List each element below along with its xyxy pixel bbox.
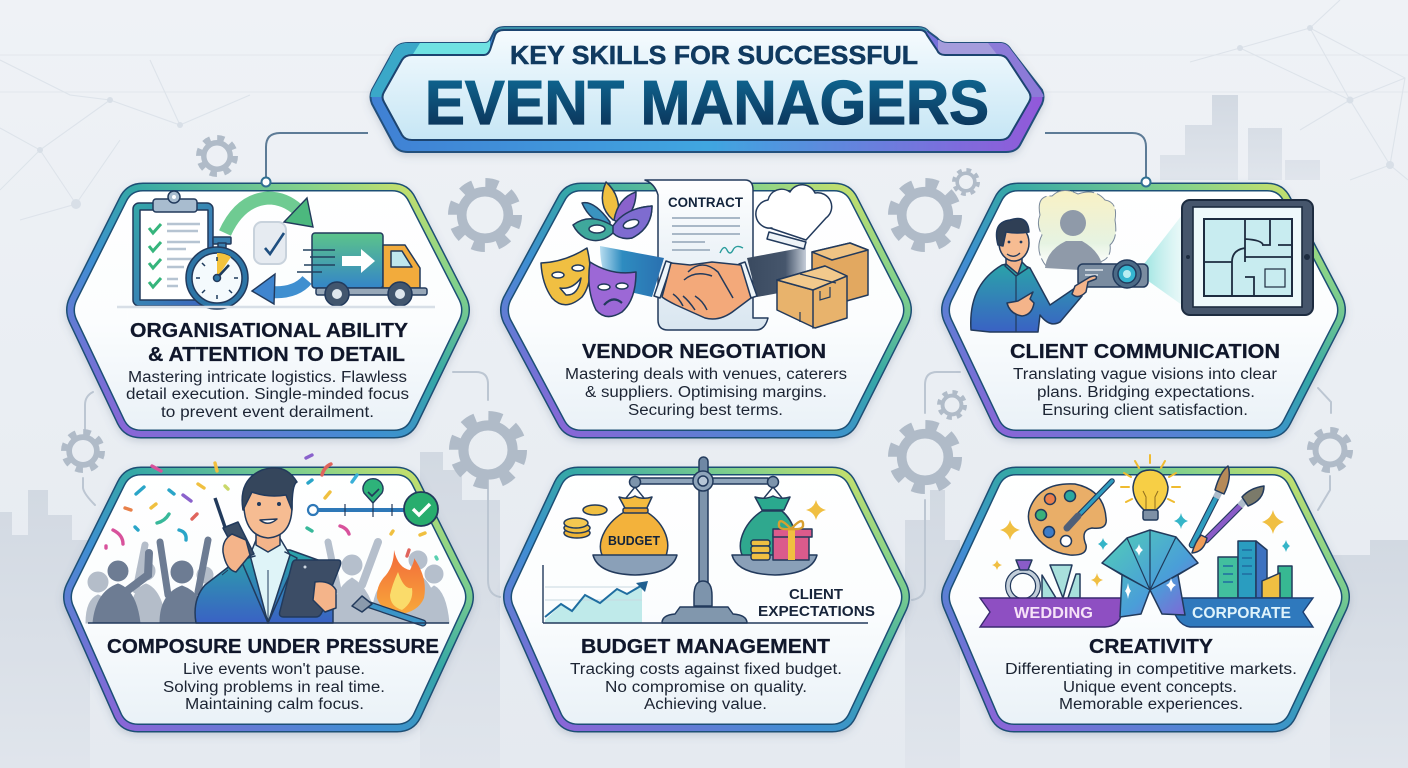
icon: tragedy mask (589, 262, 636, 317)
icon: corporate ribbon (1170, 598, 1313, 627)
panel 4 body: Live events won't pause. (183, 661, 365, 678)
icon: projector beam (1137, 215, 1182, 305)
panel 1 body: to prevent event derailment. (161, 404, 374, 421)
icon: crowd right (328, 542, 449, 623)
panel 6 body: Differentiating in competitive markets. (1005, 661, 1297, 678)
panel 1 heading (130, 320, 409, 366)
panel 3 body (1013, 366, 1277, 419)
panel 1 heading: ORGANISATIONAL ABILITY (130, 320, 409, 342)
icon: contract document (645, 180, 768, 330)
icon: sparkles (992, 510, 1290, 587)
panel: client communication (946, 187, 1342, 434)
chart: rising cost trend (543, 565, 648, 623)
panel 2 heading: VENDOR NEGOTIATION (582, 341, 826, 363)
title line 2: EVENT MANAGERS (425, 69, 989, 138)
client expectations label (758, 586, 875, 620)
panel: creativity (946, 455, 1346, 728)
icon: client expectations bag with gift (732, 487, 826, 575)
panel 5 body: Achieving value. (644, 696, 767, 713)
panel 2 body (565, 366, 847, 419)
icon: hammer (352, 596, 423, 623)
icon: creative fan (1102, 530, 1198, 617)
icon: paint brushes (1192, 466, 1264, 553)
icon: light bulb (1121, 455, 1180, 520)
panel 2 body: Mastering deals with venues, caterers (565, 366, 847, 383)
background connectors (83, 372, 1331, 600)
icon: checked clock (254, 222, 286, 264)
background grid lines (0, 55, 1408, 92)
corporate label: CORPORATE (1192, 605, 1291, 622)
panel 6 body (1005, 661, 1297, 713)
panel: organisational ability (70, 187, 466, 434)
panel 1 body (126, 369, 409, 421)
panel 4 body: Solving problems in real time. (163, 679, 385, 696)
panel 3 body: Translating vague visions into clear (1013, 366, 1277, 383)
panel 3 body: Ensuring client satisfaction. (1042, 402, 1248, 419)
panel 3 heading: CLIENT COMMUNICATION (1010, 341, 1280, 363)
icon: fire (377, 550, 425, 614)
divider (117, 306, 435, 308)
connector: title to right column (1045, 133, 1146, 178)
connector node right (1142, 178, 1150, 186)
icon: crowd left (86, 540, 213, 623)
title line 1: KEY SKILLS FOR SUCCESSFUL (510, 40, 918, 70)
icon: calm event manager (195, 468, 341, 623)
icon: wedding ribbon (980, 598, 1128, 627)
panel 6 body: Unique event concepts. (1063, 679, 1237, 696)
icon: left sleeve (600, 246, 664, 297)
panel: composure under pressure (68, 455, 470, 728)
panel 4 body (163, 661, 385, 713)
gears (64, 138, 1350, 489)
icon: wedding ring and gift (1008, 560, 1080, 601)
contract label: CONTRACT (668, 195, 744, 210)
panel 1 body: detail execution. Single-minded focus (126, 386, 409, 403)
icon: delivery truck (297, 233, 427, 306)
connector: title to left column (266, 133, 368, 178)
client expectations label: EXPECTATIONS (758, 603, 875, 620)
icon: timeline with milestones (308, 479, 438, 526)
panel 4 heading: COMPOSURE UNDER PRESSURE (107, 636, 439, 658)
icon: handshake (654, 261, 757, 319)
icon: tablet with floor plan (1182, 200, 1313, 315)
panel 3 body: plans. Bridging expectations. (1037, 384, 1255, 401)
icon: chef hat (756, 185, 832, 249)
icon: right sleeve (747, 247, 806, 297)
connector node left (262, 178, 270, 186)
panel 1 heading: & ATTENTION TO DETAIL (148, 344, 405, 366)
icon: presenter (971, 218, 1082, 332)
ground line (88, 622, 449, 624)
panel 1 body: Mastering intricate logistics. Flawless (128, 369, 407, 386)
walkie talkie (215, 498, 254, 560)
title banner (365, 26, 1048, 152)
panel 6 heading: CREATIVITY (1089, 636, 1214, 658)
client expectations label: CLIENT (789, 586, 843, 603)
icon: balance scale (630, 457, 778, 623)
icon: carnival mask (573, 182, 652, 241)
panel: vendor negotiation (504, 180, 908, 434)
budget label: BUDGET (608, 533, 660, 548)
icon: vision cloud with client silhouette (1038, 190, 1116, 270)
icon: clipboard checklist (133, 191, 213, 306)
panel 2 body: Securing best terms. (628, 402, 783, 419)
wedding label: WEDDING (1014, 605, 1093, 622)
network lines top left (0, 60, 250, 220)
icon: circular arrows (225, 198, 313, 304)
icon: projector (1072, 260, 1148, 297)
ground line (543, 622, 868, 624)
panel 2 body: & suppliers. Optimising margins. (585, 384, 827, 401)
tablet (280, 560, 341, 617)
panel 6 body: Memorable experiences. (1059, 696, 1243, 713)
icon: comedy mask (541, 248, 590, 305)
panel 5 body: Tracking costs against fixed budget. (570, 661, 842, 678)
icon: coins (564, 505, 607, 538)
panel: budget management (508, 457, 906, 728)
panel 5 heading: BUDGET MANAGEMENT (581, 636, 830, 658)
icon: cardboard boxes (777, 243, 868, 328)
icon: paint palette (1028, 481, 1112, 555)
panel 5 body: No compromise on quality. (605, 679, 807, 696)
icon: stopwatch (186, 237, 248, 309)
icon: buildings (1218, 541, 1292, 598)
icon: budget bag on pan (593, 487, 677, 575)
panel 5 body (570, 661, 842, 713)
network lines top right (1190, 0, 1408, 180)
icon: confetti (106, 455, 437, 559)
panel 4 body: Maintaining calm focus. (185, 696, 364, 713)
